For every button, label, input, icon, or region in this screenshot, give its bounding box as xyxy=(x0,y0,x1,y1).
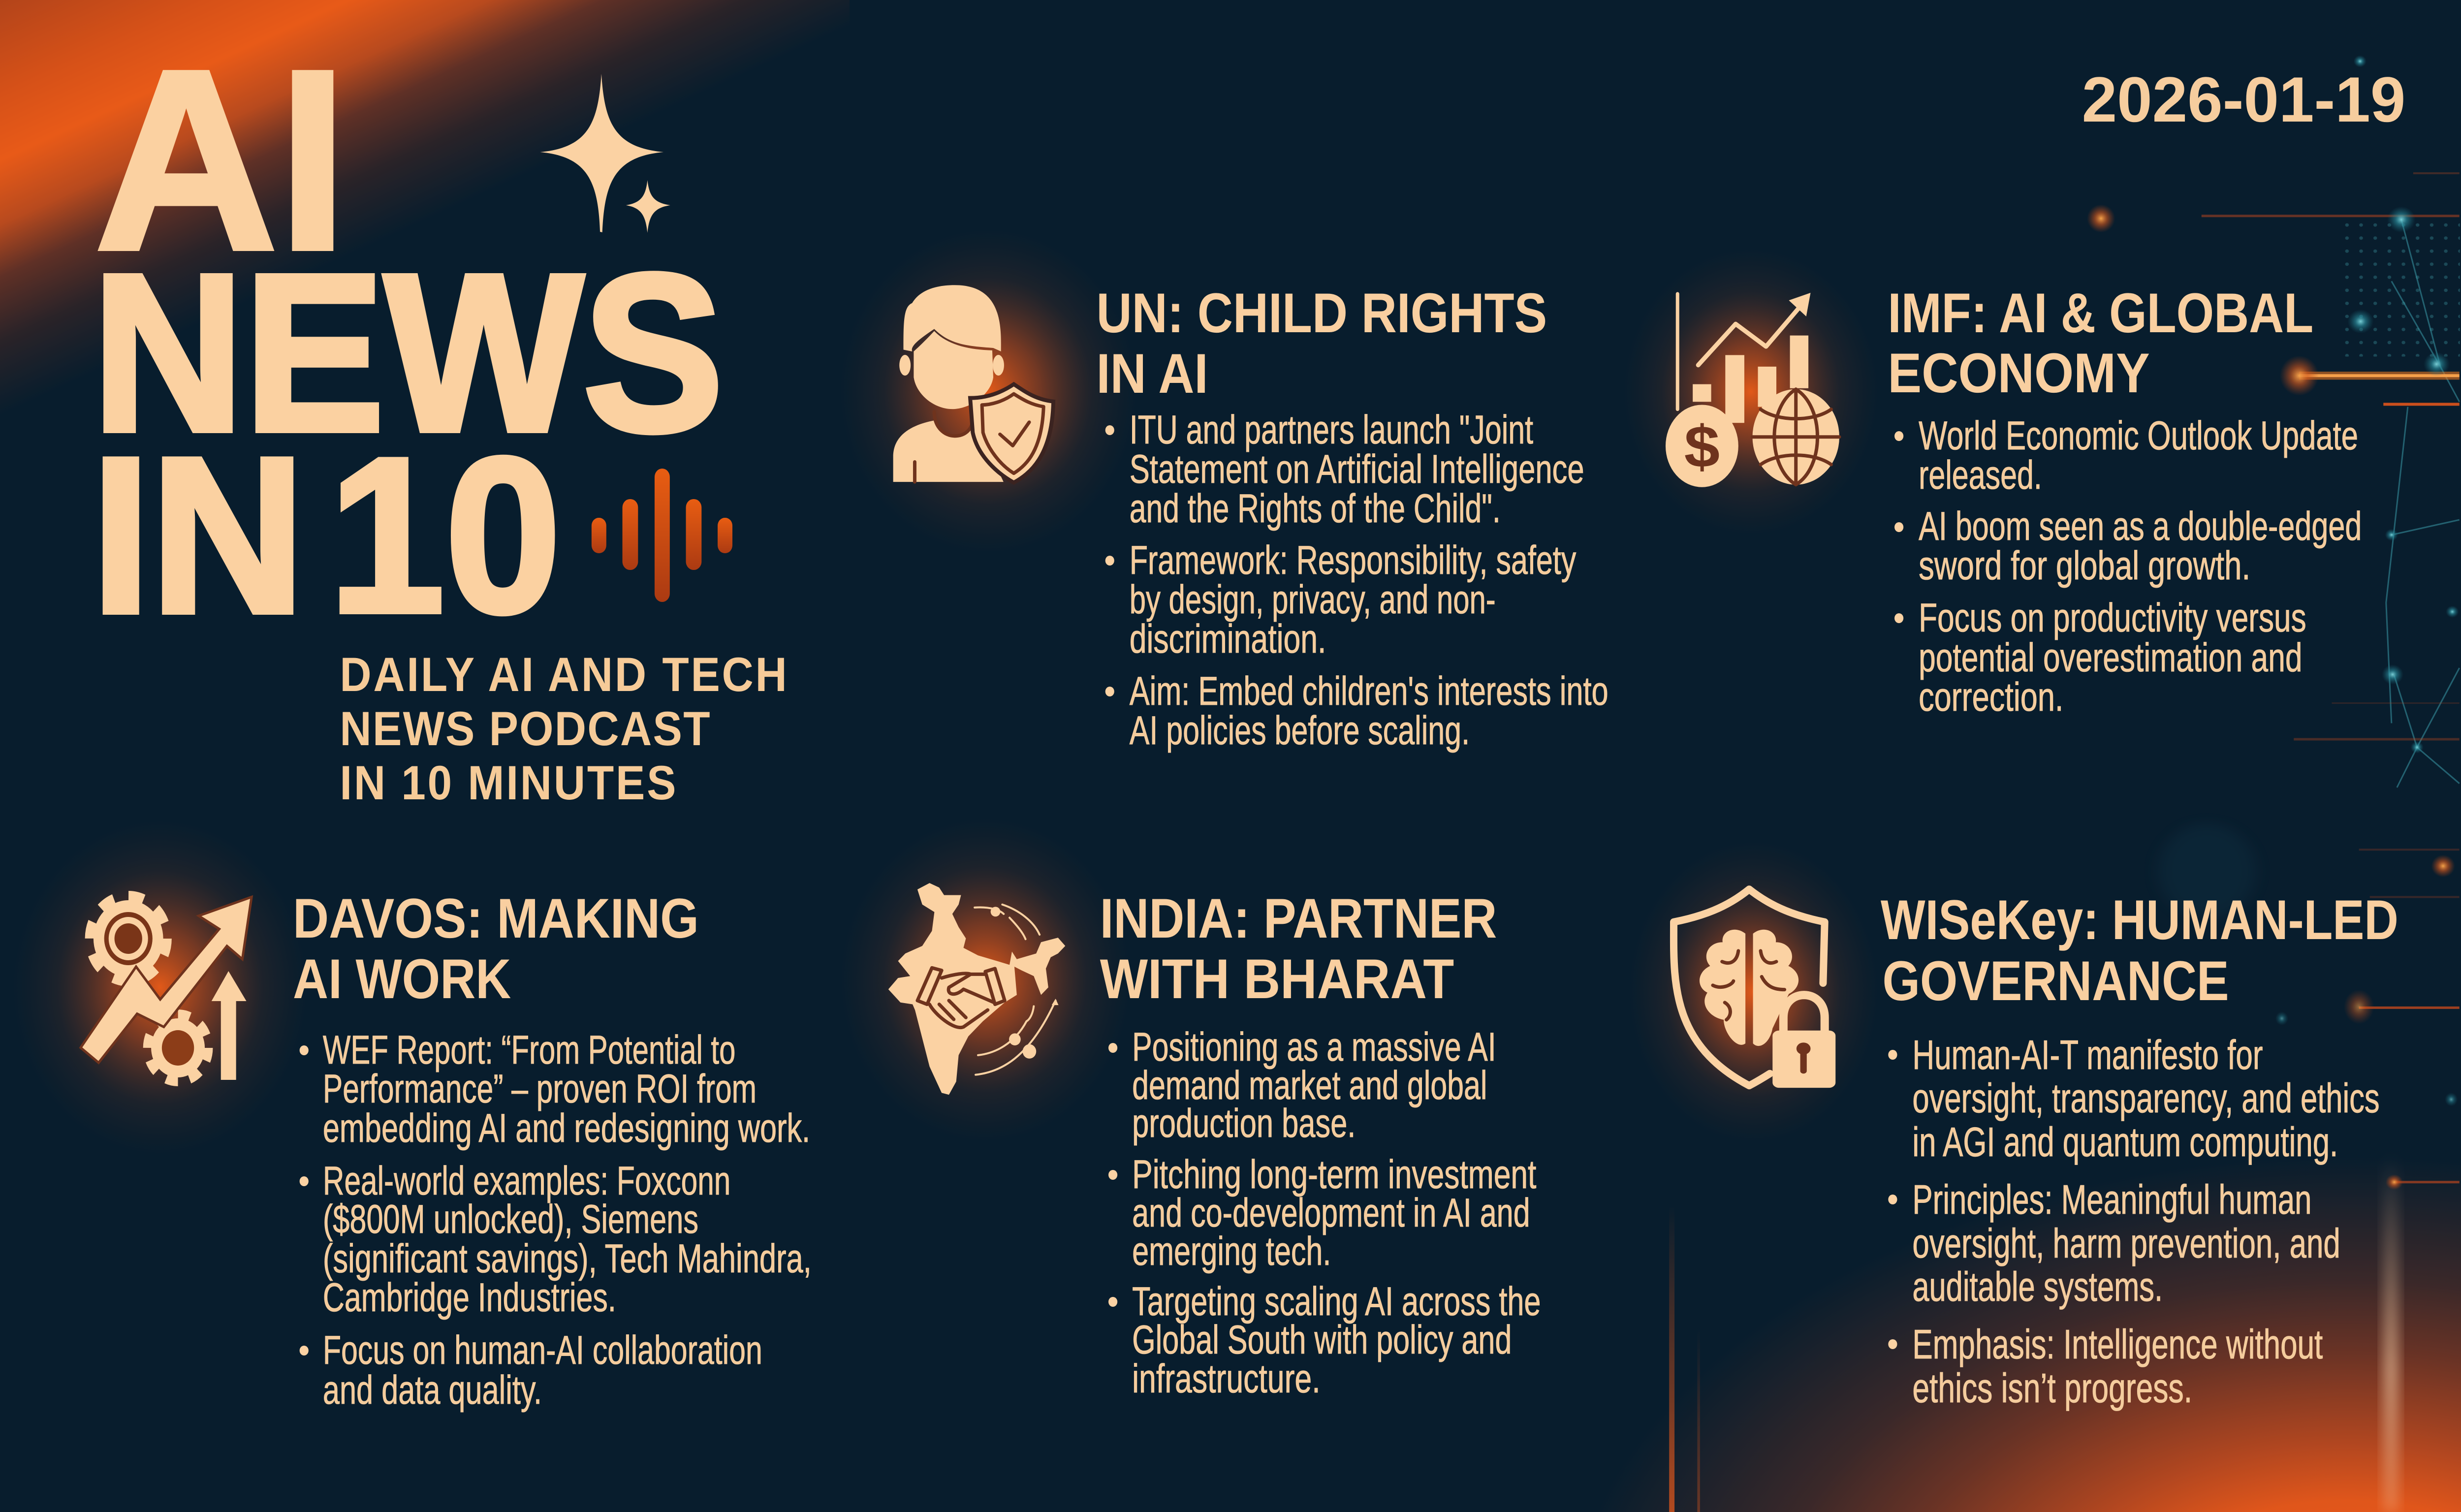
heading: IN AI xyxy=(1096,343,1208,405)
subtitle: IN 10 MINUTES xyxy=(340,756,676,810)
bullet list: emerging tech. xyxy=(1132,1229,1331,1274)
heading xyxy=(1100,887,1497,1010)
bullet list: Principles: Meaningful human xyxy=(1912,1176,2312,1223)
bullet list: potential overestimation and xyxy=(1919,635,2303,680)
title: AI News in 10 xyxy=(91,17,724,659)
title: AI News in 10: NEWS xyxy=(92,228,724,478)
network lights xyxy=(2087,55,2460,788)
icon: audio waveform xyxy=(592,469,732,602)
bullet list: Positioning as a massive AI xyxy=(1132,1025,1496,1070)
date: 2026-01-19 xyxy=(2082,63,2405,135)
panel: IMF AI and global economy xyxy=(1623,249,2362,720)
bullet list: WEF Report: “From Potential to xyxy=(323,1028,735,1072)
bullet list: embedding AI and redesigning work. xyxy=(323,1106,810,1151)
panel: WISeKey human-led governance xyxy=(1629,841,2398,1411)
bullet list: and co-development in AI and xyxy=(1132,1191,1530,1235)
bullet list: correction. xyxy=(1919,675,2063,720)
heading: WISeKey: HUMAN-LED xyxy=(1881,889,2398,951)
bullet list: AI policies before scaling. xyxy=(1130,708,1470,753)
bullet list: Cambridge Industries. xyxy=(323,1275,616,1320)
bullet list: auditable systems. xyxy=(1912,1263,2163,1310)
bullet list: discrimination. xyxy=(1130,617,1326,662)
bullet list: Pitching long-term investment xyxy=(1132,1152,1537,1197)
bullet list: Emphasis: Intelligence without xyxy=(1912,1321,2323,1367)
heading xyxy=(1888,282,2313,405)
panel: Davos making AI work xyxy=(12,820,812,1413)
icon: chart with coin and globe: $ xyxy=(1684,414,1720,480)
heading xyxy=(1881,889,2398,1012)
lower network lights xyxy=(2158,824,2460,1190)
bullet list: AI boom seen as a double-edged xyxy=(1919,504,2362,549)
bullet list: Real-world examples: Foxconn xyxy=(323,1159,730,1203)
bullet list: Aim: Embed children's interests into xyxy=(1130,669,1609,714)
icon: India map with handshake xyxy=(840,818,1131,1142)
bullet list: Performance” – proven ROI from xyxy=(323,1067,757,1111)
bullet list: demand market and global xyxy=(1132,1063,1487,1108)
heading: WITH BHARAT xyxy=(1100,948,1454,1010)
bullet list xyxy=(1108,1025,1541,1401)
title: AI News in 10: IN xyxy=(91,412,305,659)
bullet list: (significant savings), Tech Mahindra, xyxy=(323,1236,812,1281)
icon: shield with brain and lock xyxy=(1629,841,1878,1142)
bullet list: Focus on human-AI collaboration xyxy=(323,1328,762,1373)
icon: chart with coin and globe xyxy=(1623,249,1878,535)
bullet list: released. xyxy=(1919,453,2042,498)
icon: child with shield xyxy=(839,229,1137,553)
bullet list: Targeting scaling AI across the xyxy=(1132,1279,1541,1324)
heading: INDIA: PARTNER xyxy=(1100,887,1497,950)
bullet list: sword for global growth. xyxy=(1919,543,2250,588)
bullet list: and the Rights of the Child". xyxy=(1130,486,1501,531)
bullet list: Statement on Artificial Intelligence xyxy=(1130,447,1584,492)
bullet list: oversight, harm prevention, and xyxy=(1912,1220,2340,1266)
bullet list xyxy=(300,1028,812,1413)
bullet list xyxy=(1105,408,1609,753)
subtitle xyxy=(340,647,787,810)
bullet list: ITU and partners launch "Joint xyxy=(1130,408,1533,452)
icon: gears and growth arrow xyxy=(12,820,308,1155)
heading xyxy=(1096,282,1547,405)
bullet list: Global South with policy and xyxy=(1132,1318,1512,1362)
title: AI News in 10: 10 xyxy=(329,412,561,659)
heading xyxy=(293,887,699,1010)
bullet list: production base. xyxy=(1132,1101,1356,1146)
bullet list: Framework: Responsibility, safety xyxy=(1130,538,1576,583)
bullet list: Focus on productivity versus xyxy=(1919,596,2306,640)
bullet list: ($800M unlocked), Siemens xyxy=(323,1197,698,1242)
heading: AI WORK xyxy=(293,948,511,1010)
bullet list: World Economic Outlook Update xyxy=(1919,413,2358,458)
bullet list xyxy=(1894,413,2362,720)
heading: UN: CHILD RIGHTS xyxy=(1096,282,1547,345)
title: AI News in 10: AI xyxy=(95,17,348,303)
panel: UN child rights in AI xyxy=(839,229,1609,753)
heading: IMF: AI & GLOBAL xyxy=(1888,282,2313,345)
bullet list: in AGI and quantum computing. xyxy=(1912,1119,2338,1165)
icon: sparkle stars xyxy=(540,74,670,233)
bullet list xyxy=(1888,1032,2380,1411)
bullet list: infrastructure. xyxy=(1132,1356,1321,1401)
bullet list: ethics isn’t progress. xyxy=(1912,1365,2192,1411)
bullet list: by design, privacy, and non- xyxy=(1130,577,1496,622)
heading: GOVERNANCE xyxy=(1882,950,2229,1012)
heading: ECONOMY xyxy=(1888,342,2150,405)
panel: India partner with Bharat xyxy=(840,818,1541,1401)
bullet list: and data quality. xyxy=(323,1368,542,1413)
heading: DAVOS: MAKING xyxy=(293,887,699,950)
subtitle: DAILY AI AND TECH xyxy=(340,647,787,701)
bullet list: Human-AI-T manifesto for xyxy=(1912,1032,2263,1078)
subtitle: NEWS PODCAST xyxy=(340,701,710,756)
